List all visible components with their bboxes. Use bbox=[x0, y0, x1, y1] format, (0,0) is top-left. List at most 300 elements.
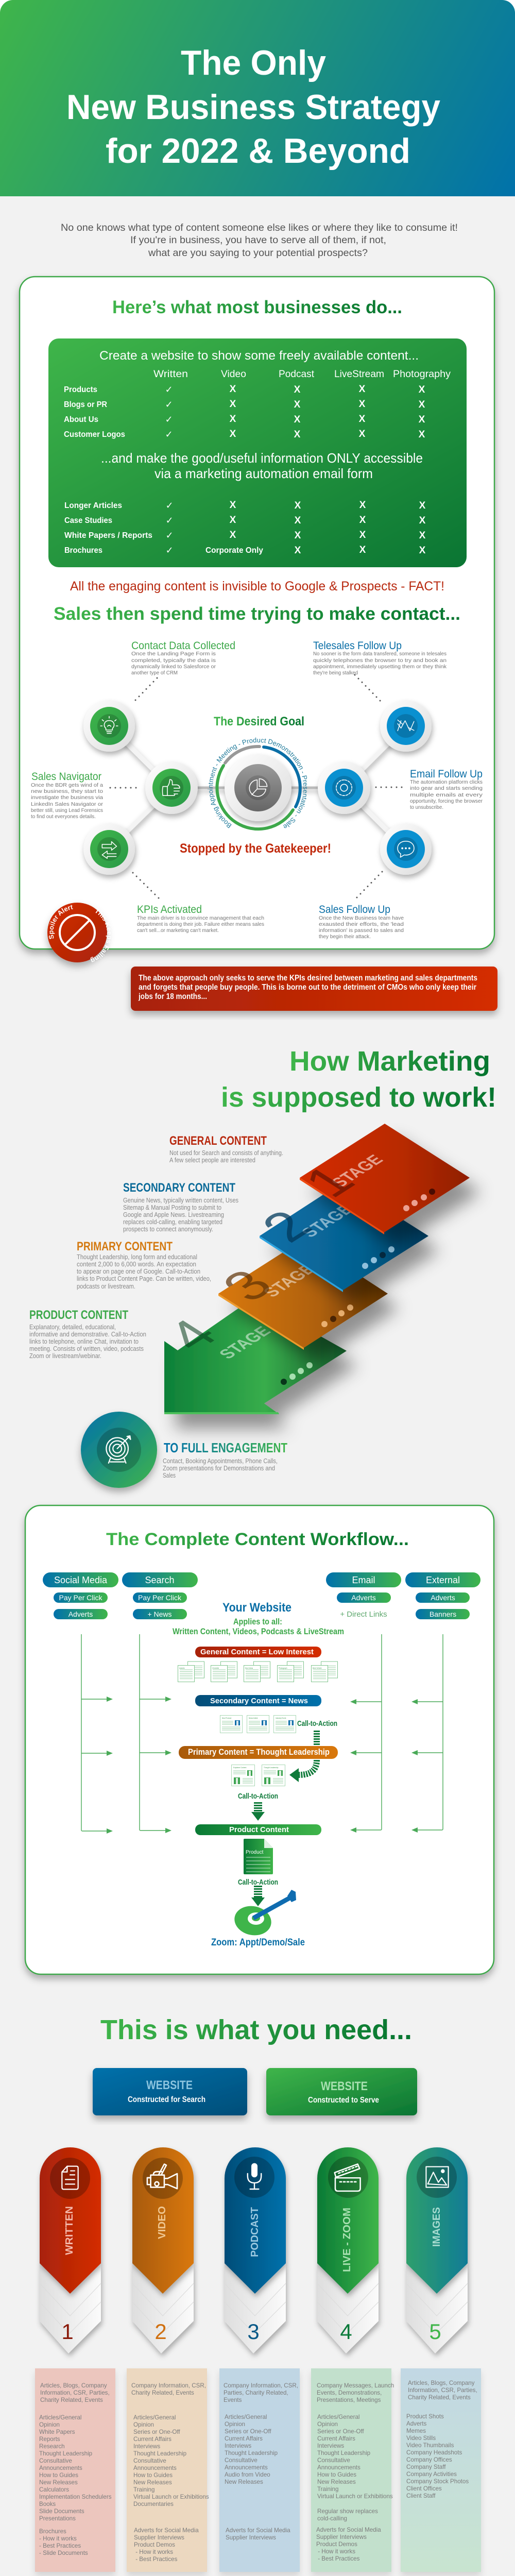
column: live content types: Virtual Launch or Exhibitions bbox=[317, 2493, 393, 2500]
pill: product content bbox=[195, 1824, 321, 1835]
channel: social media: Adverts bbox=[68, 1610, 93, 1618]
column: video content types: Series or One-Off bbox=[133, 2429, 180, 2435]
desired goal dial: Booking Appointment - Meeting - Product Demonstration - Presentation - Sale bbox=[208, 738, 307, 828]
column: written content types: - How it works bbox=[39, 2535, 77, 2542]
column: written content types: Thought Leadership bbox=[39, 2450, 92, 2457]
column: live content types: How to Guides bbox=[317, 2471, 356, 2478]
text: primary content: to appear on page one of Google. Call-to-Action bbox=[77, 1268, 200, 1275]
panel: green content table: ✓ bbox=[165, 530, 174, 541]
column: video content types: Articles/General bbox=[133, 2414, 176, 2421]
text: secondary content: prospects to connect anonymously. bbox=[123, 1226, 213, 1233]
text: product content: Explanatory, detailed, educational, bbox=[29, 1324, 116, 1331]
stage 1: STAGE bbox=[328, 1152, 387, 1190]
title: The Only bbox=[181, 43, 326, 82]
column: live content types: Company Messages, Launch bbox=[317, 2382, 394, 2389]
intro text: No one knows what type of content someone else likes or where they like to consume it! bbox=[61, 223, 458, 233]
panel: green content table: ✓ bbox=[165, 414, 173, 425]
panel: green content table: LiveStream bbox=[334, 369, 384, 380]
text: contact data: completed, typically the data is bbox=[131, 657, 216, 664]
step: lower-left node bbox=[83, 823, 135, 875]
column: video content types: Interviews bbox=[133, 2443, 160, 2450]
intro text: what are you saying to your potential prospects? bbox=[148, 248, 368, 259]
stage 2 bbox=[249, 1182, 428, 1292]
column: images content types: Charity Related, Events bbox=[408, 2394, 471, 2401]
panel: green content table: Video bbox=[221, 369, 246, 380]
heading: The Complete Content Workflow... bbox=[106, 1530, 409, 1549]
column: podcast content types: Interviews bbox=[225, 2443, 251, 2449]
step: mid-right node bbox=[318, 761, 370, 814]
step: mid-left node bbox=[145, 761, 198, 814]
panel: green content table bbox=[48, 338, 467, 567]
stage stack bbox=[154, 1124, 470, 1414]
column: images content types bbox=[401, 2368, 481, 2572]
your website text: Written Content, Videos, Podcasts & LiveStream bbox=[173, 1626, 344, 1636]
spoiler alert badge: This Keeps Failing bbox=[91, 910, 111, 962]
icon: bullseye with arrow bbox=[232, 1890, 296, 1939]
text: contact data: another type of CRM bbox=[131, 670, 178, 676]
news documents: New Product bbox=[222, 1717, 231, 1719]
text: to full engagement: TO FULL ENGAGEMENT bbox=[164, 1440, 287, 1455]
panel: green content table: X bbox=[294, 399, 301, 410]
column: images content types: Company Headshots bbox=[406, 2449, 462, 2456]
text: sales follow up: they begin their attack. bbox=[319, 934, 371, 940]
bookmark: images: IMAGES bbox=[431, 2207, 442, 2247]
panel: green content table: X bbox=[359, 414, 366, 425]
channel: social media: Social Media bbox=[54, 1575, 108, 1585]
text: secondary content: SECONDARY CONTENT bbox=[123, 1181, 235, 1195]
column: podcast content types: Supplier Interviews bbox=[226, 2534, 276, 2541]
column: live content types: cold-calling bbox=[317, 2515, 347, 2522]
text: to full engagement bbox=[163, 1440, 287, 1479]
channel: search bbox=[122, 1572, 198, 1619]
column: images content types: Product Shots bbox=[406, 2413, 444, 2420]
panel: content workflow bbox=[25, 1505, 494, 1974]
panel: green content table: Blogs or PR bbox=[64, 400, 107, 409]
card: website search: WEBSITE bbox=[146, 2078, 193, 2092]
column: images content types: Company Staff bbox=[406, 2464, 446, 2470]
column: live content types: Interviews bbox=[317, 2443, 344, 2449]
text: primary content: Thought Leadership, long form and educational bbox=[77, 1253, 197, 1261]
red fact line: All the engaging content is invisible to Google & Prospects - FACT! bbox=[70, 579, 444, 594]
bookmark: written: WRITTEN bbox=[64, 2206, 75, 2255]
heading: desired goal: The Desired Goal bbox=[214, 715, 304, 728]
panel: green content table: Create a website to show some freely available content... bbox=[99, 349, 419, 363]
panel: what most businesses do bbox=[14, 276, 500, 958]
card: website serve bbox=[266, 2068, 417, 2115]
panel: green content table: X bbox=[230, 384, 236, 395]
bookmark: images bbox=[406, 2147, 468, 2353]
column: images content types: Company Stock Photos bbox=[406, 2478, 469, 2485]
thought leadership documents: Thought Leadership bbox=[264, 1767, 279, 1769]
text: email follow up: Email Follow Up bbox=[410, 768, 483, 780]
column: live content types bbox=[311, 2368, 394, 2572]
panel: green content table: Customer Logos bbox=[64, 430, 125, 439]
text: secondary content: Sitemap & Manual Posting to submit to bbox=[123, 1204, 221, 1211]
bookmark: images: 5 bbox=[429, 2319, 441, 2344]
thought leadership documents: Explainer Content bbox=[233, 1767, 246, 1769]
column: video content types: Supplier Interviews bbox=[134, 2534, 184, 2541]
text: sales navigator: Once the BDR gets wind of a bbox=[31, 782, 103, 788]
text: contact data bbox=[131, 640, 235, 676]
text: KPIs: KPIs Activated bbox=[137, 904, 202, 916]
channel: search: Search bbox=[145, 1575, 175, 1585]
general content documents bbox=[178, 1662, 338, 1682]
panel: green content table: X bbox=[419, 530, 426, 541]
column: written content types: Opinion bbox=[39, 2421, 60, 2428]
step: sales navigator upper-left node bbox=[83, 700, 135, 752]
stage 2: STAGE bbox=[298, 1202, 357, 1240]
column: live content types: Opinion bbox=[317, 2421, 338, 2428]
panel: green content table: X bbox=[295, 515, 301, 526]
panel: green content table: X bbox=[294, 429, 301, 440]
bookmark: podcast: PODCAST bbox=[249, 2207, 261, 2257]
column: video content types: Adverts for Social Media bbox=[134, 2527, 199, 2534]
panel: green content table: X bbox=[230, 500, 236, 511]
column: written content types: Reports bbox=[39, 2436, 60, 2443]
column: live content types: Presentations, Meetings bbox=[317, 2397, 381, 2403]
card: website search: Constructed for Search bbox=[128, 2095, 205, 2104]
column: live content types: Consultative bbox=[317, 2457, 350, 2464]
pill: secondary content bbox=[195, 1695, 321, 1706]
text: general content bbox=[169, 1134, 283, 1164]
column: podcast content types: Announcements bbox=[225, 2464, 268, 2471]
hub connectors bbox=[109, 726, 406, 849]
text: to full engagement: Zoom presentations for Demonstrations and bbox=[163, 1465, 275, 1472]
card: website serve: WEBSITE bbox=[321, 2079, 368, 2093]
channel: external: Adverts bbox=[431, 1594, 455, 1602]
general content documents: Awards bbox=[179, 1667, 185, 1669]
column: podcast content types: Thought Leadership bbox=[225, 2450, 278, 2456]
news documents: Industry Event bbox=[276, 1717, 286, 1719]
text: product content bbox=[29, 1308, 146, 1360]
column: images content types: Company Offices bbox=[406, 2456, 452, 2463]
panel: green content table: ✓ bbox=[165, 399, 173, 410]
bookmark: live zoom: LIVE - ZOOM bbox=[341, 2208, 353, 2272]
stage 1: 1 bbox=[291, 1157, 368, 1206]
column: podcast content types: Opinion bbox=[225, 2421, 245, 2428]
column: images content types: Memes bbox=[406, 2428, 426, 2434]
column: written content types: Brochures bbox=[39, 2528, 66, 2535]
bookmark: podcast bbox=[225, 2147, 286, 2353]
column: live content types: Articles/General bbox=[317, 2414, 359, 2420]
panel: green content table: ...and make the good/useful information ONLY accessible bbox=[101, 450, 423, 466]
column: podcast content types: Audio from Video bbox=[225, 2471, 270, 2478]
news documents bbox=[220, 1716, 296, 1733]
column: written content types: Charity Related, Events bbox=[40, 2397, 103, 2403]
column: video content types: Company Information, CSR, bbox=[131, 2382, 206, 2389]
stage 3: STAGE bbox=[260, 1262, 319, 1300]
panel: green content table: Corporate Only bbox=[205, 546, 263, 555]
pill: primary content bbox=[179, 1746, 338, 1759]
pill: general content: General Content = Low Interest bbox=[200, 1648, 314, 1656]
red callout bbox=[131, 967, 497, 1011]
intro text: If you're in business, you have to serve all of them, if not, bbox=[130, 235, 386, 246]
column: live content types: Thought Leadership bbox=[317, 2450, 370, 2456]
call to action 3 bbox=[238, 1878, 278, 1906]
call to action 2: Call-to-Action bbox=[238, 1792, 278, 1801]
text: contact data: dynamically linked to Salesforce or bbox=[131, 664, 216, 670]
panel: green content table: White Papers / Reports bbox=[64, 531, 152, 540]
your website text: Applies to all: bbox=[233, 1617, 282, 1626]
column: video content types: Opinion bbox=[133, 2421, 154, 2428]
text: contact data: Contact Data Collected bbox=[131, 640, 235, 652]
channel: email: Email bbox=[352, 1575, 375, 1585]
call to action 1 bbox=[297, 1719, 337, 1745]
text: telesales: No sooner is the form data transfered, someone in telesales bbox=[313, 651, 447, 657]
panel: green content table: Products bbox=[64, 385, 97, 394]
panel: green content table: X bbox=[419, 399, 425, 410]
column: live content types: - Best Practices bbox=[316, 2555, 360, 2562]
column: live content types: - How it works bbox=[316, 2548, 355, 2555]
bookmark: video bbox=[132, 2147, 194, 2353]
panel: green content table: X bbox=[419, 429, 425, 440]
text: telesales: quickly telephones the browser to try and book an bbox=[313, 657, 447, 664]
bookmark: video: VIDEO bbox=[157, 2206, 168, 2239]
channel: external bbox=[405, 1572, 480, 1619]
panel: green content table: X bbox=[359, 384, 366, 395]
pill: primary content: Primary Content = Thought Leadership bbox=[188, 1747, 330, 1757]
stage 4 arrow: 4 bbox=[154, 1311, 230, 1359]
heading: how marketing bbox=[221, 1046, 496, 1113]
panel: green content table: X bbox=[230, 530, 236, 540]
heading: how marketing: How Marketing bbox=[289, 1046, 490, 1077]
column: video content types: How to Guides bbox=[133, 2472, 173, 2479]
text: sales follow up: exausted their efforts, the 'lead bbox=[319, 921, 404, 927]
channel: social media: Pay Per Click bbox=[59, 1594, 103, 1602]
text: email follow up: opportunity, forcing the browser bbox=[410, 798, 483, 804]
general content documents: Best Vehicle bbox=[313, 1667, 322, 1669]
column: video content types: Current Affairs bbox=[133, 2436, 171, 2443]
text: sales navigator: new business, they start to bbox=[31, 788, 103, 794]
column: written content types: Implementation Schedulers bbox=[39, 2494, 112, 2500]
column: podcast content types: Company Information, CSR, bbox=[224, 2382, 298, 2389]
column: live content types: Announcements bbox=[317, 2464, 360, 2471]
general content documents: New Ideas bbox=[245, 1667, 253, 1669]
panel: green content table: ✓ bbox=[165, 384, 173, 395]
text: KPIs: The main driver is to convince management that each bbox=[137, 915, 264, 921]
column: video content types: Virtual Launch or Exhibitions bbox=[133, 2494, 209, 2500]
panel: green content table: X bbox=[359, 545, 366, 555]
panel: green content table: X bbox=[294, 384, 301, 395]
icon: target circle bbox=[81, 1412, 157, 1488]
text: email follow up: into gear and starts sending bbox=[410, 785, 483, 791]
text: telesales: Telesales Follow Up bbox=[313, 640, 402, 652]
text: sales navigator: to find out everyones details. bbox=[31, 814, 96, 820]
column: written content types: Presentations bbox=[39, 2515, 76, 2522]
heading: what you need: This is what you need... bbox=[100, 2014, 412, 2045]
text: email follow up: multiple emails at every bbox=[410, 792, 483, 798]
column: video content types: Announcements bbox=[133, 2465, 177, 2471]
column: written content types bbox=[35, 2368, 115, 2572]
your website text bbox=[173, 1601, 344, 1636]
pill: secondary content: Secondary Content = News bbox=[210, 1697, 308, 1705]
column: written content types: How to Guides bbox=[39, 2472, 78, 2479]
text: sales navigator: better still, using Lead Forensics bbox=[31, 807, 103, 814]
flow lines and arrows bbox=[81, 1634, 443, 1834]
column: images content types: Articles, Blogs, Company bbox=[408, 2380, 475, 2386]
news documents: News Article bbox=[249, 1717, 258, 1719]
bookmark: written: 1 bbox=[61, 2319, 74, 2344]
column: images content types: Company Activities bbox=[406, 2471, 457, 2478]
text: secondary content: Google and Apple News. Livestreaming bbox=[123, 1211, 224, 1218]
column: written content types: Consultative bbox=[39, 2458, 72, 2464]
general content documents: Checklist bbox=[212, 1667, 219, 1669]
stage 4 arrow bbox=[154, 1298, 347, 1414]
call to action 2 bbox=[238, 1792, 278, 1821]
bookmark: video: 2 bbox=[154, 2319, 167, 2344]
panel: green content table: X bbox=[419, 414, 425, 425]
general content documents: Photograph bbox=[279, 1667, 287, 1669]
channel: search: + News bbox=[147, 1610, 172, 1618]
column: written content types: White Papers bbox=[39, 2429, 75, 2435]
text: to full engagement: Contact, Booking Appointments, Phone Calls, bbox=[163, 1458, 278, 1465]
text: general content: GENERAL CONTENT bbox=[169, 1134, 267, 1148]
column: podcast content types: New Releases bbox=[225, 2479, 263, 2485]
column: live content types: Regular show replaces bbox=[317, 2508, 378, 2515]
panel: green content table: Longer Articles bbox=[64, 501, 122, 510]
column: podcast content types: Adverts for Social Media bbox=[226, 2527, 290, 2534]
text: primary content: links to Product Content Page. Can be written, video, bbox=[77, 1275, 211, 1282]
text: secondary content: replaces cold-calling, enabling targeted bbox=[123, 1218, 222, 1226]
text: secondary content bbox=[123, 1181, 238, 1233]
title: New Business Strategy bbox=[66, 88, 440, 127]
stage 2: 2 bbox=[249, 1202, 325, 1250]
intro text bbox=[61, 223, 458, 259]
text: primary content: PRIMARY CONTENT bbox=[77, 1240, 173, 1253]
panel: green content table: Photography bbox=[393, 369, 451, 380]
product document: Product bbox=[246, 1850, 264, 1855]
panel: green content table: via a marketing automation email form bbox=[154, 466, 373, 481]
text: sales navigator: LinkedIn Sales Navigator or bbox=[31, 801, 104, 807]
panel: green content table: X bbox=[419, 515, 426, 526]
column: podcast content types: Events bbox=[224, 2397, 242, 2403]
caption: Zoom: Appt/Demo/Sale bbox=[211, 1937, 305, 1948]
column: written content types: - Best Practices bbox=[39, 2543, 81, 2549]
text: sales navigator: Sales Navigator bbox=[31, 771, 101, 783]
column: images content types: Client Staff bbox=[406, 2493, 436, 2499]
column: images content types: Client Offices bbox=[406, 2485, 442, 2492]
panel: green content table: X bbox=[359, 515, 366, 526]
header banner bbox=[0, 0, 515, 196]
spoiler alert badge: Spoiler Alert bbox=[48, 905, 73, 939]
text: sales follow up: information' is passed to sales and bbox=[319, 927, 404, 934]
panel: green content table: About Us bbox=[64, 415, 98, 424]
heading: stopped: Stopped by the Gatekeeper! bbox=[180, 841, 331, 856]
text: product content: links to telephone, online Chat, invitation to bbox=[29, 1338, 139, 1345]
bookmark: written bbox=[40, 2147, 101, 2353]
text: sales follow up: Once the New Business team have bbox=[319, 915, 404, 921]
column: podcast content types: Current Affairs bbox=[225, 2435, 263, 2442]
panel: green content table: X bbox=[295, 500, 301, 511]
panel: green content table: Case Studies bbox=[64, 516, 112, 525]
channel: search: Pay Per Click bbox=[138, 1594, 182, 1602]
text: product content: informative and demonstrative. Call-to-Action bbox=[29, 1331, 146, 1338]
panel: green content table: X bbox=[419, 500, 426, 511]
column: live content types: Series or One-Off bbox=[317, 2428, 364, 2435]
red callout: The above approach only seeks to serve the KPIs desired between marketing and sales departments bbox=[139, 974, 477, 982]
column: written content types: Articles, Blogs, Company bbox=[40, 2382, 107, 2389]
panel: green content table: Written bbox=[153, 369, 188, 380]
text: general content: Not used for Search and consists of anything. bbox=[169, 1149, 283, 1157]
column: live content types: Current Affairs bbox=[317, 2435, 355, 2442]
text: KPIs: department is doing their job. Failure either means sales bbox=[137, 921, 264, 927]
text: KPIs bbox=[137, 904, 264, 934]
panel: green content table: X bbox=[230, 414, 236, 425]
spoiler alert badge bbox=[43, 903, 111, 971]
column: written content types: Articles/General bbox=[39, 2414, 81, 2421]
text: email follow up: to unsubscribe. bbox=[410, 804, 443, 810]
panel: green content table: X bbox=[230, 515, 236, 526]
bookmark: live zoom: 4 bbox=[340, 2319, 352, 2344]
text: KPIs: can't sell...or marketing can't market. bbox=[137, 927, 219, 934]
dotted connectors bbox=[110, 675, 404, 900]
stage 3: 3 bbox=[210, 1261, 286, 1310]
column: video content types: Charity Related, Events bbox=[131, 2389, 194, 2396]
product document bbox=[244, 1839, 273, 1874]
text: contact data: Once the Landing Page Form is bbox=[131, 651, 216, 657]
your website text: Your Website bbox=[222, 1601, 291, 1615]
panel: green content table: ✓ bbox=[165, 429, 173, 440]
panel: green content table: X bbox=[230, 429, 236, 439]
channel: external: Banners bbox=[430, 1610, 456, 1618]
heading: how marketing: is supposed to work! bbox=[221, 1082, 496, 1113]
panel: green content table: X bbox=[230, 399, 236, 410]
text: telesales bbox=[313, 640, 447, 676]
panel: green content table: Podcast bbox=[279, 369, 315, 380]
column: video content types bbox=[127, 2368, 209, 2572]
column: video content types: Training bbox=[133, 2486, 154, 2493]
panel: green content table: X bbox=[359, 530, 366, 540]
text: email follow up bbox=[410, 768, 483, 810]
column: live content types: Supplier Interviews bbox=[316, 2534, 367, 2540]
panel: green content table: X bbox=[294, 414, 301, 425]
column: video content types: - How it works bbox=[134, 2549, 173, 2555]
column: live content types: Training bbox=[317, 2486, 338, 2493]
column: written content types: Information, CSR, Parties, bbox=[40, 2389, 110, 2396]
channel: email bbox=[326, 1572, 401, 1619]
panel: green content table: X bbox=[359, 429, 366, 439]
column: video content types: - Best Practices bbox=[134, 2556, 178, 2563]
panel: green content table: X bbox=[295, 545, 301, 556]
text: primary content bbox=[77, 1240, 211, 1290]
panel: green content table: ✓ bbox=[165, 515, 174, 526]
column: podcast content types: Series or One-Off bbox=[225, 2428, 271, 2435]
step: upper-right node bbox=[380, 700, 432, 752]
call to action 1: Call-to-Action bbox=[297, 1719, 337, 1728]
column: written content types: Announcements bbox=[39, 2465, 82, 2471]
column: images content types: Information, CSR, Parties, bbox=[408, 2387, 477, 2394]
panel: green content table: X bbox=[419, 545, 426, 556]
stage 3 bbox=[210, 1239, 388, 1350]
text: sales follow up: Sales Follow Up bbox=[319, 904, 390, 916]
column: written content types: Research bbox=[39, 2443, 65, 2450]
red callout: jobs for 18 months... bbox=[138, 992, 207, 1001]
bookmark: podcast: 3 bbox=[247, 2319, 260, 2344]
panel: green content table: ✓ bbox=[165, 500, 174, 511]
text: product content: Zoom or livestream/webinar. bbox=[29, 1352, 101, 1360]
column: video content types: Consultative bbox=[133, 2458, 166, 2464]
text: secondary content: Genuine News, typically written content, Uses bbox=[123, 1197, 238, 1204]
column: written content types: Slide Documents bbox=[39, 2508, 84, 2515]
column: live content types: Adverts for Social Media bbox=[316, 2527, 381, 2533]
text: sales follow up bbox=[319, 904, 404, 940]
text: telesales: they're being stalked bbox=[313, 670, 358, 676]
panel: green content table: Brochures bbox=[64, 546, 102, 555]
text: sales navigator: investigate the business via bbox=[31, 794, 103, 801]
column: live content types: Product Demos bbox=[316, 2541, 357, 2548]
column: live content types: New Releases bbox=[317, 2479, 356, 2485]
column: written content types: Calculators bbox=[39, 2486, 69, 2493]
